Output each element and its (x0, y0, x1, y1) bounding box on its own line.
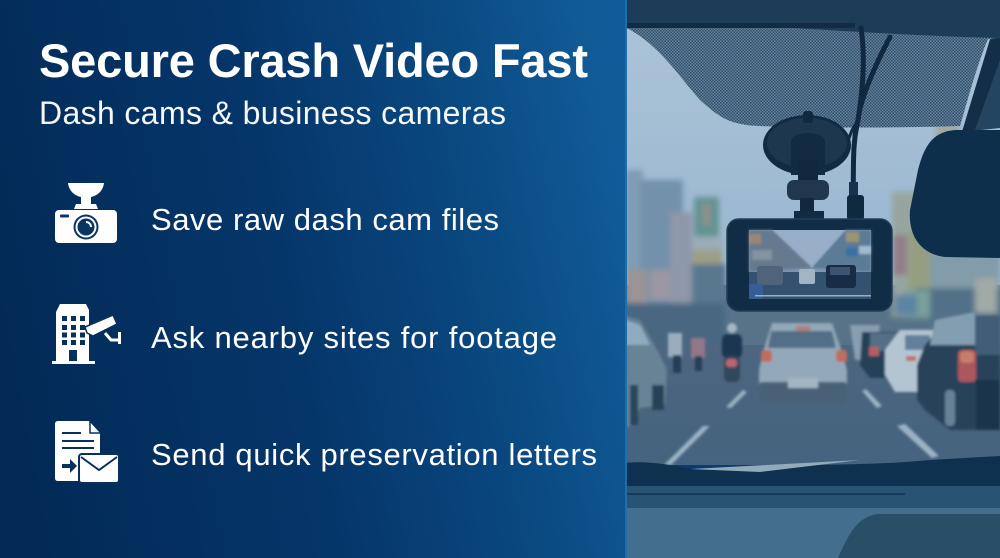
sun strip dots and header (625, 27, 1000, 128)
sky (625, 25, 1000, 285)
text: save raw dash cam files: Save raw dash cam files (151, 202, 499, 237)
traffic right (850, 325, 880, 360)
vehicles (625, 312, 1000, 430)
blue photo tint (627, 28, 1000, 472)
pedestrians and scooter (668, 333, 682, 357)
text: send quick preservation letters: Send quick preservation letters (151, 437, 597, 472)
icon: document and envelope (55, 420, 119, 483)
suction mount (763, 115, 851, 175)
street buildings (625, 125, 1000, 348)
text: ask nearby sites for footage: Ask nearby sites for footage (151, 320, 557, 355)
road (625, 345, 1000, 465)
right dark car (916, 337, 1000, 431)
dash cam body (727, 219, 892, 311)
center silver car (758, 322, 848, 384)
icon: dash cam (55, 183, 117, 243)
dash cam power cables (847, 28, 890, 198)
mirror (910, 130, 1000, 258)
dash cam screen (749, 230, 871, 299)
panel: blue text background (0, 0, 627, 558)
a-pillar (962, 37, 1000, 132)
left parked car (625, 316, 667, 428)
panel: dash cam windshield photo (625, 0, 1000, 558)
dashboard (627, 456, 1000, 486)
lane markings (664, 389, 939, 465)
icon: building with security camera (52, 304, 120, 364)
title: Secure Crash Video Fast (39, 34, 588, 87)
subtitle: Dash cams & business cameras (39, 95, 506, 131)
